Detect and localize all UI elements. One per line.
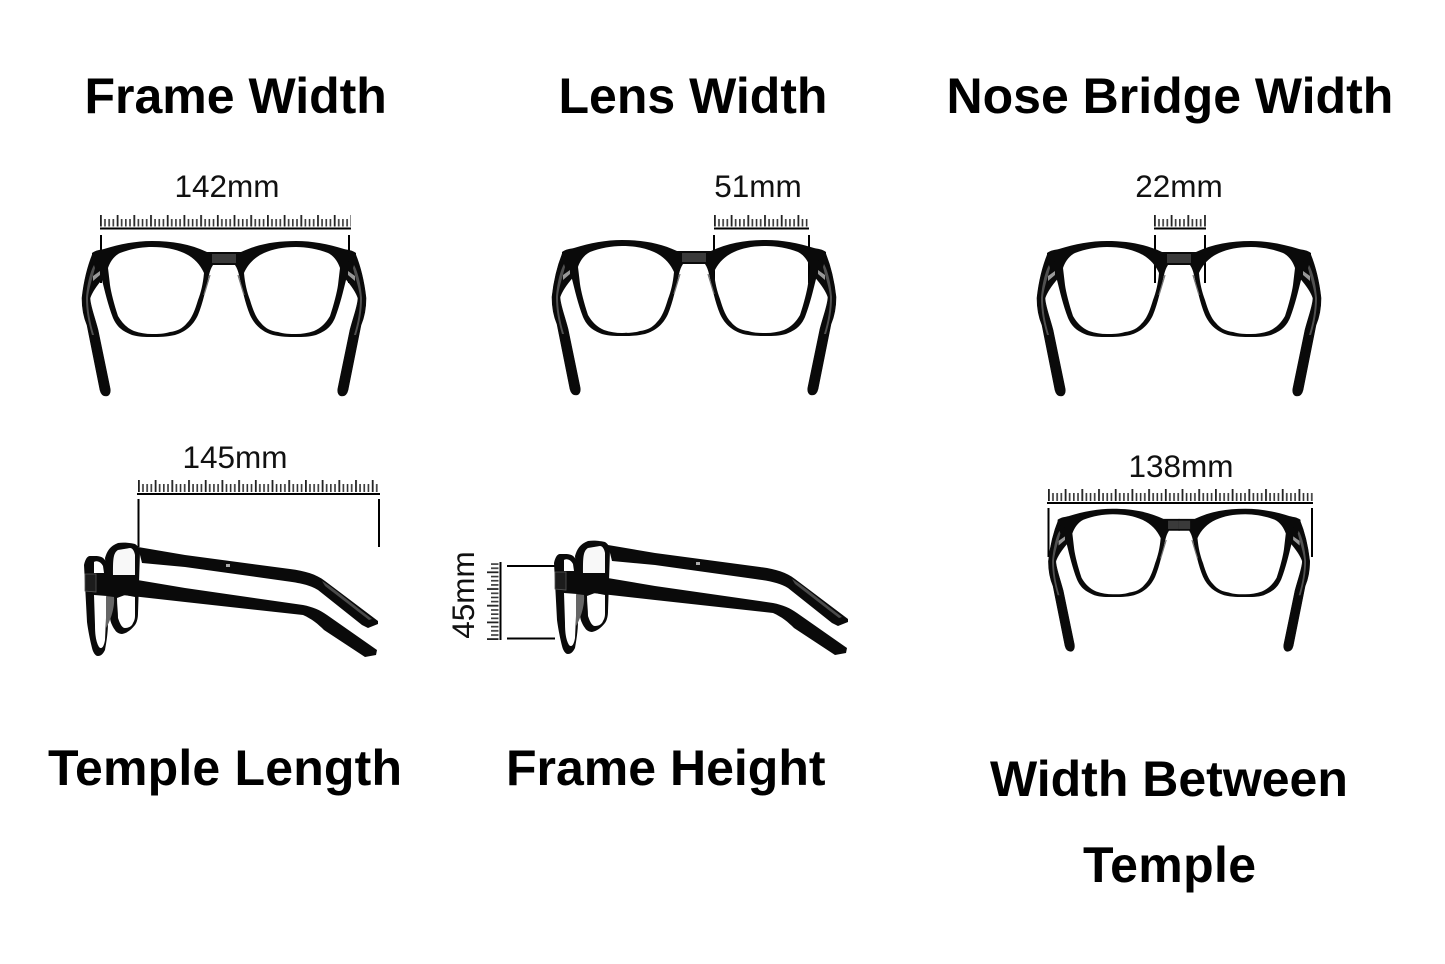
heading: nose bridge width: Nose Bridge Width: [946, 68, 1393, 124]
measurement: 138mm: 138mm: [1128, 448, 1234, 484]
heading: width between temple: Temple: [1083, 837, 1256, 893]
measurement: 51mm: 51mm: [714, 168, 802, 204]
heading: temple length: Temple Length: [48, 740, 402, 796]
measurement: 142mm: 142mm: [174, 168, 280, 204]
panel: nose bridge width: [946, 68, 1393, 396]
panel: temple length: [48, 439, 402, 796]
heading: lens width: Lens Width: [558, 68, 827, 124]
icon: glasses front view: [552, 240, 836, 395]
ruler: width between temple: [1047, 489, 1313, 557]
ruler: temple length: [137, 480, 380, 547]
icon: glasses side view: [554, 541, 848, 655]
measurement: 22mm: 22mm: [1135, 168, 1223, 204]
heading: width between temple: Width Between: [990, 751, 1348, 807]
ruler: nose bridge width: [1154, 215, 1206, 283]
measurement: 145mm: 145mm: [182, 439, 288, 475]
ruler: lens width: [713, 215, 810, 283]
heading: frame width: Frame Width: [84, 68, 387, 124]
icon: glasses front view: [82, 241, 366, 396]
panel: width between temple: [990, 448, 1362, 893]
ruler: frame width: [100, 215, 351, 283]
panel: lens width: [552, 68, 836, 395]
icon: glasses front view: [1037, 241, 1321, 396]
measurement: 45mm: 45mm: [445, 551, 481, 639]
heading: frame height: Frame Height: [506, 740, 826, 796]
icon: glasses front view, scaled: [1048, 509, 1310, 651]
panel: frame width: [82, 68, 387, 396]
ruler: frame height: [487, 562, 555, 640]
panel: frame height: [445, 541, 848, 796]
icon: glasses side view: [84, 543, 378, 657]
